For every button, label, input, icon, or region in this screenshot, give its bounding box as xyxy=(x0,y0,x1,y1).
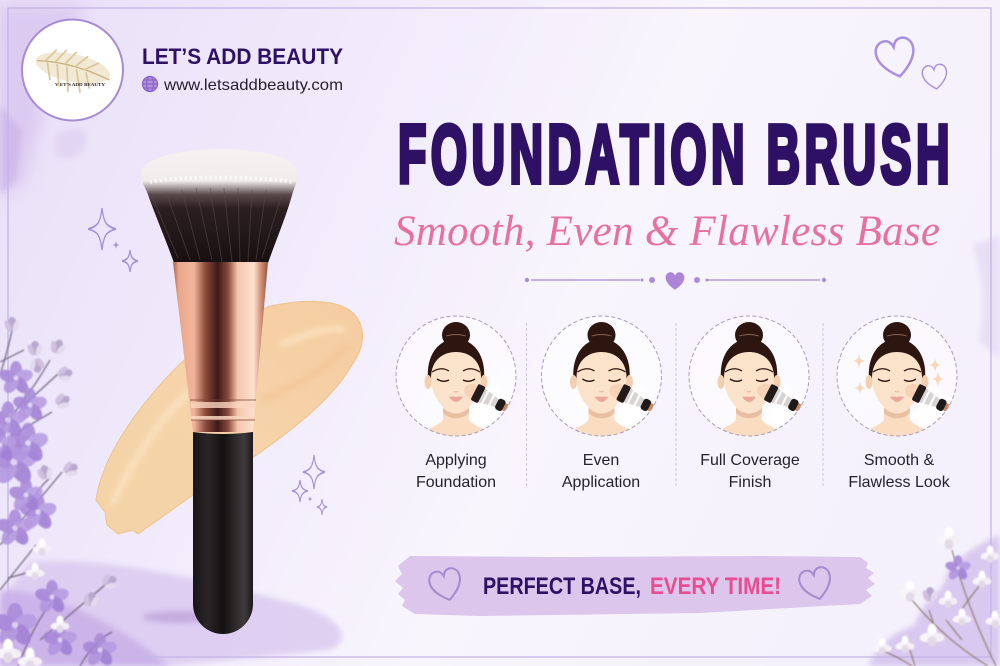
step dividers xyxy=(526,323,823,488)
tagline dark: PERFECT BASE, xyxy=(483,573,641,600)
foundation swatch xyxy=(96,301,362,534)
tagline banner xyxy=(395,556,875,616)
icon: even application xyxy=(542,316,668,438)
sparkles left xyxy=(88,208,138,272)
label: Full Coverage xyxy=(700,452,800,469)
brand name: LET’S ADD BEAUTY xyxy=(142,44,343,69)
website url: www.letsaddbeauty.com xyxy=(163,77,343,94)
subtitle: Smooth, Even & Flawless Base xyxy=(394,208,940,255)
step 1 xyxy=(396,316,522,491)
logo wordmark: V ET'S ADD BEAUTY xyxy=(55,82,106,87)
flowers bottom left xyxy=(0,317,121,666)
label line 2: Foundation xyxy=(416,474,496,491)
step 3 xyxy=(689,316,815,491)
tagline pink: EVERY TIME! xyxy=(650,573,781,600)
heart divider xyxy=(525,272,826,290)
label line 2: Application xyxy=(562,474,640,491)
ferrule xyxy=(173,262,268,432)
website row xyxy=(142,76,343,94)
flowers bottom right xyxy=(872,527,1000,666)
step 2 xyxy=(542,316,668,491)
icon: outline hearts xyxy=(874,36,949,91)
step 4 xyxy=(837,316,963,491)
icon: globe xyxy=(142,76,158,92)
logo badge xyxy=(22,20,123,120)
label: Smooth & xyxy=(864,452,934,469)
icon: applying foundation xyxy=(396,316,522,438)
icon: left heart xyxy=(427,566,465,604)
icon: full coverage xyxy=(689,316,815,438)
bristles xyxy=(141,149,298,263)
icon: golden feather logo xyxy=(31,45,113,99)
icon: flawless look xyxy=(837,316,963,438)
label: Applying xyxy=(425,452,487,469)
label line 2: Finish xyxy=(729,474,771,491)
handle xyxy=(193,432,253,634)
icon: glow sparkles xyxy=(853,353,944,395)
foundation brush xyxy=(141,149,298,634)
label: Even xyxy=(583,452,619,469)
icon: filled heart xyxy=(666,272,684,290)
sparkles right xyxy=(292,455,327,515)
label line 2: Flawless Look xyxy=(848,474,951,491)
title: FOUNDATION BRUSH xyxy=(398,108,950,201)
icon: right heart xyxy=(797,565,835,603)
brush stroke background xyxy=(395,556,875,616)
